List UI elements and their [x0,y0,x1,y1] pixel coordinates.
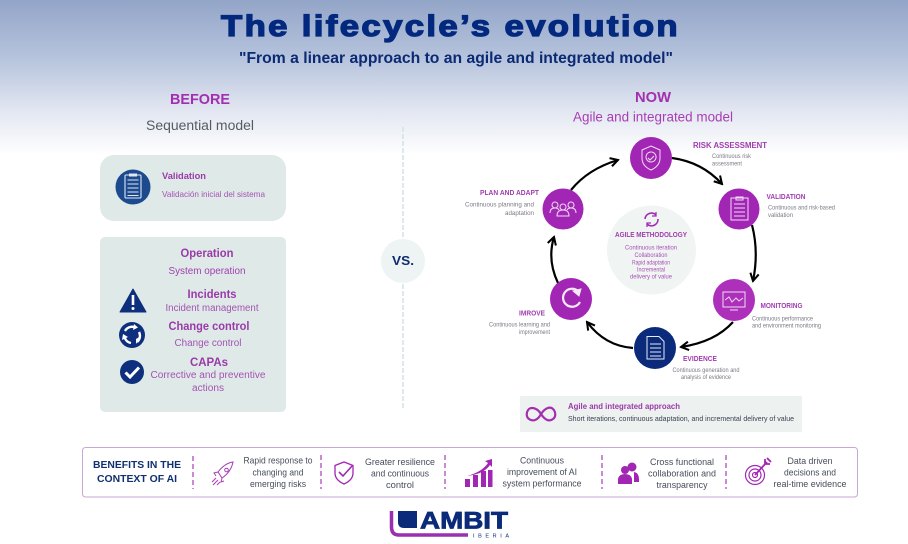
methodology text: Collaboration [634,252,668,259]
change control heading: Change control [168,321,250,333]
panel: operation: actions [192,383,224,394]
icon: clipboard [116,170,150,204]
callout heading: Agile and integrated approach [568,401,680,411]
benefit: resilience [365,457,435,490]
logo: ambit iberia [392,508,509,540]
evidence description: Continuous generation and [672,367,740,374]
risk label: RISK ASSESSMENT [693,141,767,150]
icon: shield [642,146,660,170]
monitoring description: Continuous performance [752,316,813,322]
improve label: IMROVE [519,310,545,318]
benefit: rapid response: Rapid response to [244,456,313,466]
icon: people [550,202,576,216]
benefits heading: BENEFITS IN THE [93,460,181,471]
title: The lifecycle’s evolution [221,10,680,43]
node: validation [718,188,836,230]
node: evidence [634,327,740,381]
heading: before: BEFORE [170,91,230,108]
subheading: sequential model: Sequential model [146,118,254,133]
panel: validation [100,155,286,221]
methodology text: Incremental [637,266,665,274]
vs badge: VS. [392,253,414,268]
node: evidence: analysis of evidence [681,374,731,381]
risk description: Continuous risk [712,153,752,160]
benefit: improvement [502,456,582,488]
icon: people [618,462,639,484]
logo: ambit iberia: IBERIA [473,534,509,540]
node: monitoring [713,279,822,330]
node: plan and adapt: adaptation [505,210,535,217]
benefit: resilience: and continuous [371,468,430,478]
icon: change control [119,322,145,348]
validation description: Validación inicial del sistema [162,189,265,199]
benefit: collaboration: collaboration and [648,468,716,478]
incidents description: Incident management [166,303,259,314]
improve description: Continuous learning and [489,322,550,328]
node: improve [489,278,592,336]
panel: benefits: CONTEXT OF AI [97,474,177,485]
methodology text: Rapid adaptation [632,260,670,266]
icon: shield check [335,462,353,484]
center: agile methodology [607,206,696,294]
callout: agile and integrated approach [520,396,802,432]
panel: operation [100,237,286,412]
methodology text: delivery of value [630,274,673,280]
methodology text [625,244,678,280]
node: risk assessment: assessment [712,160,742,168]
benefit: collaboration [648,457,716,490]
icon: target [746,458,771,484]
heading: now: NOW [635,89,672,106]
benefit: rapid response [244,456,313,489]
callout text: Short iterations, continuous adaptation, and incremental delivery of value [568,414,794,423]
node: risk assessment [630,137,767,179]
incidents heading: Incidents [188,289,236,301]
methodology heading: AGILE METHODOLOGY [615,232,687,239]
icon: document [647,336,664,359]
plan description: Continuous planning and [465,202,535,208]
benefit: improvement: Continuous [520,456,565,466]
validation description: Continuous and risk-based [768,204,836,212]
validation label: VALIDATION [766,194,806,201]
icon: monitor [723,292,745,310]
benefit: improvement: system performance [502,478,582,488]
icon: refresh [563,289,580,307]
icon: infinity [527,408,555,420]
benefit: data driven: decisions and [784,468,836,478]
icon: clipboard [731,197,748,220]
methodology text: Continuous iteration [625,244,678,252]
subheading: agile and integrated model: Agile and integrated model [573,110,733,124]
operation description: System operation [168,266,246,277]
plan label: PLAN AND ADAPT [480,190,540,197]
node: monitoring: and environment monitoring [752,322,822,330]
benefit: data driven: Data driven [788,456,833,466]
change control description: Change control [174,338,242,349]
icon: growth chart [465,459,492,487]
cycle arrows [551,158,756,348]
monitoring label: MONITORING [760,303,803,310]
logo: ambit iberia: AMBIT [420,508,508,534]
operation heading: Operation [180,248,234,260]
vs badge [381,239,425,283]
icon: check mark [120,360,144,384]
icon: sync [645,212,658,227]
node: improve: improvement [519,329,550,336]
benefit: data driven [774,456,847,489]
icon: rocket [212,462,233,485]
benefit: resilience: control [386,480,414,490]
benefit: resilience: Greater resilience [365,457,435,467]
evidence label: EVIDENCE [683,356,717,363]
icon: warning triangle [120,289,146,312]
validation heading: Validation [162,171,206,182]
panel: benefits [82,448,858,497]
capas description: Corrective and preventive [150,370,266,381]
benefit: data driven: real-time evidence [774,479,847,489]
benefit: collaboration: Cross functional [650,457,714,467]
benefit: rapid response: emerging risks [250,479,307,489]
benefit: improvement: improvement of AI [507,467,577,477]
node: validation: validation [768,212,794,219]
node: plan and adapt [465,188,584,230]
subtitle: "From a linear approach to an agile and integrated model" [239,50,673,67]
benefit: collaboration: transparency [656,480,708,490]
benefit: rapid response: changing and [252,468,304,478]
capas heading: CAPAs [190,357,228,369]
